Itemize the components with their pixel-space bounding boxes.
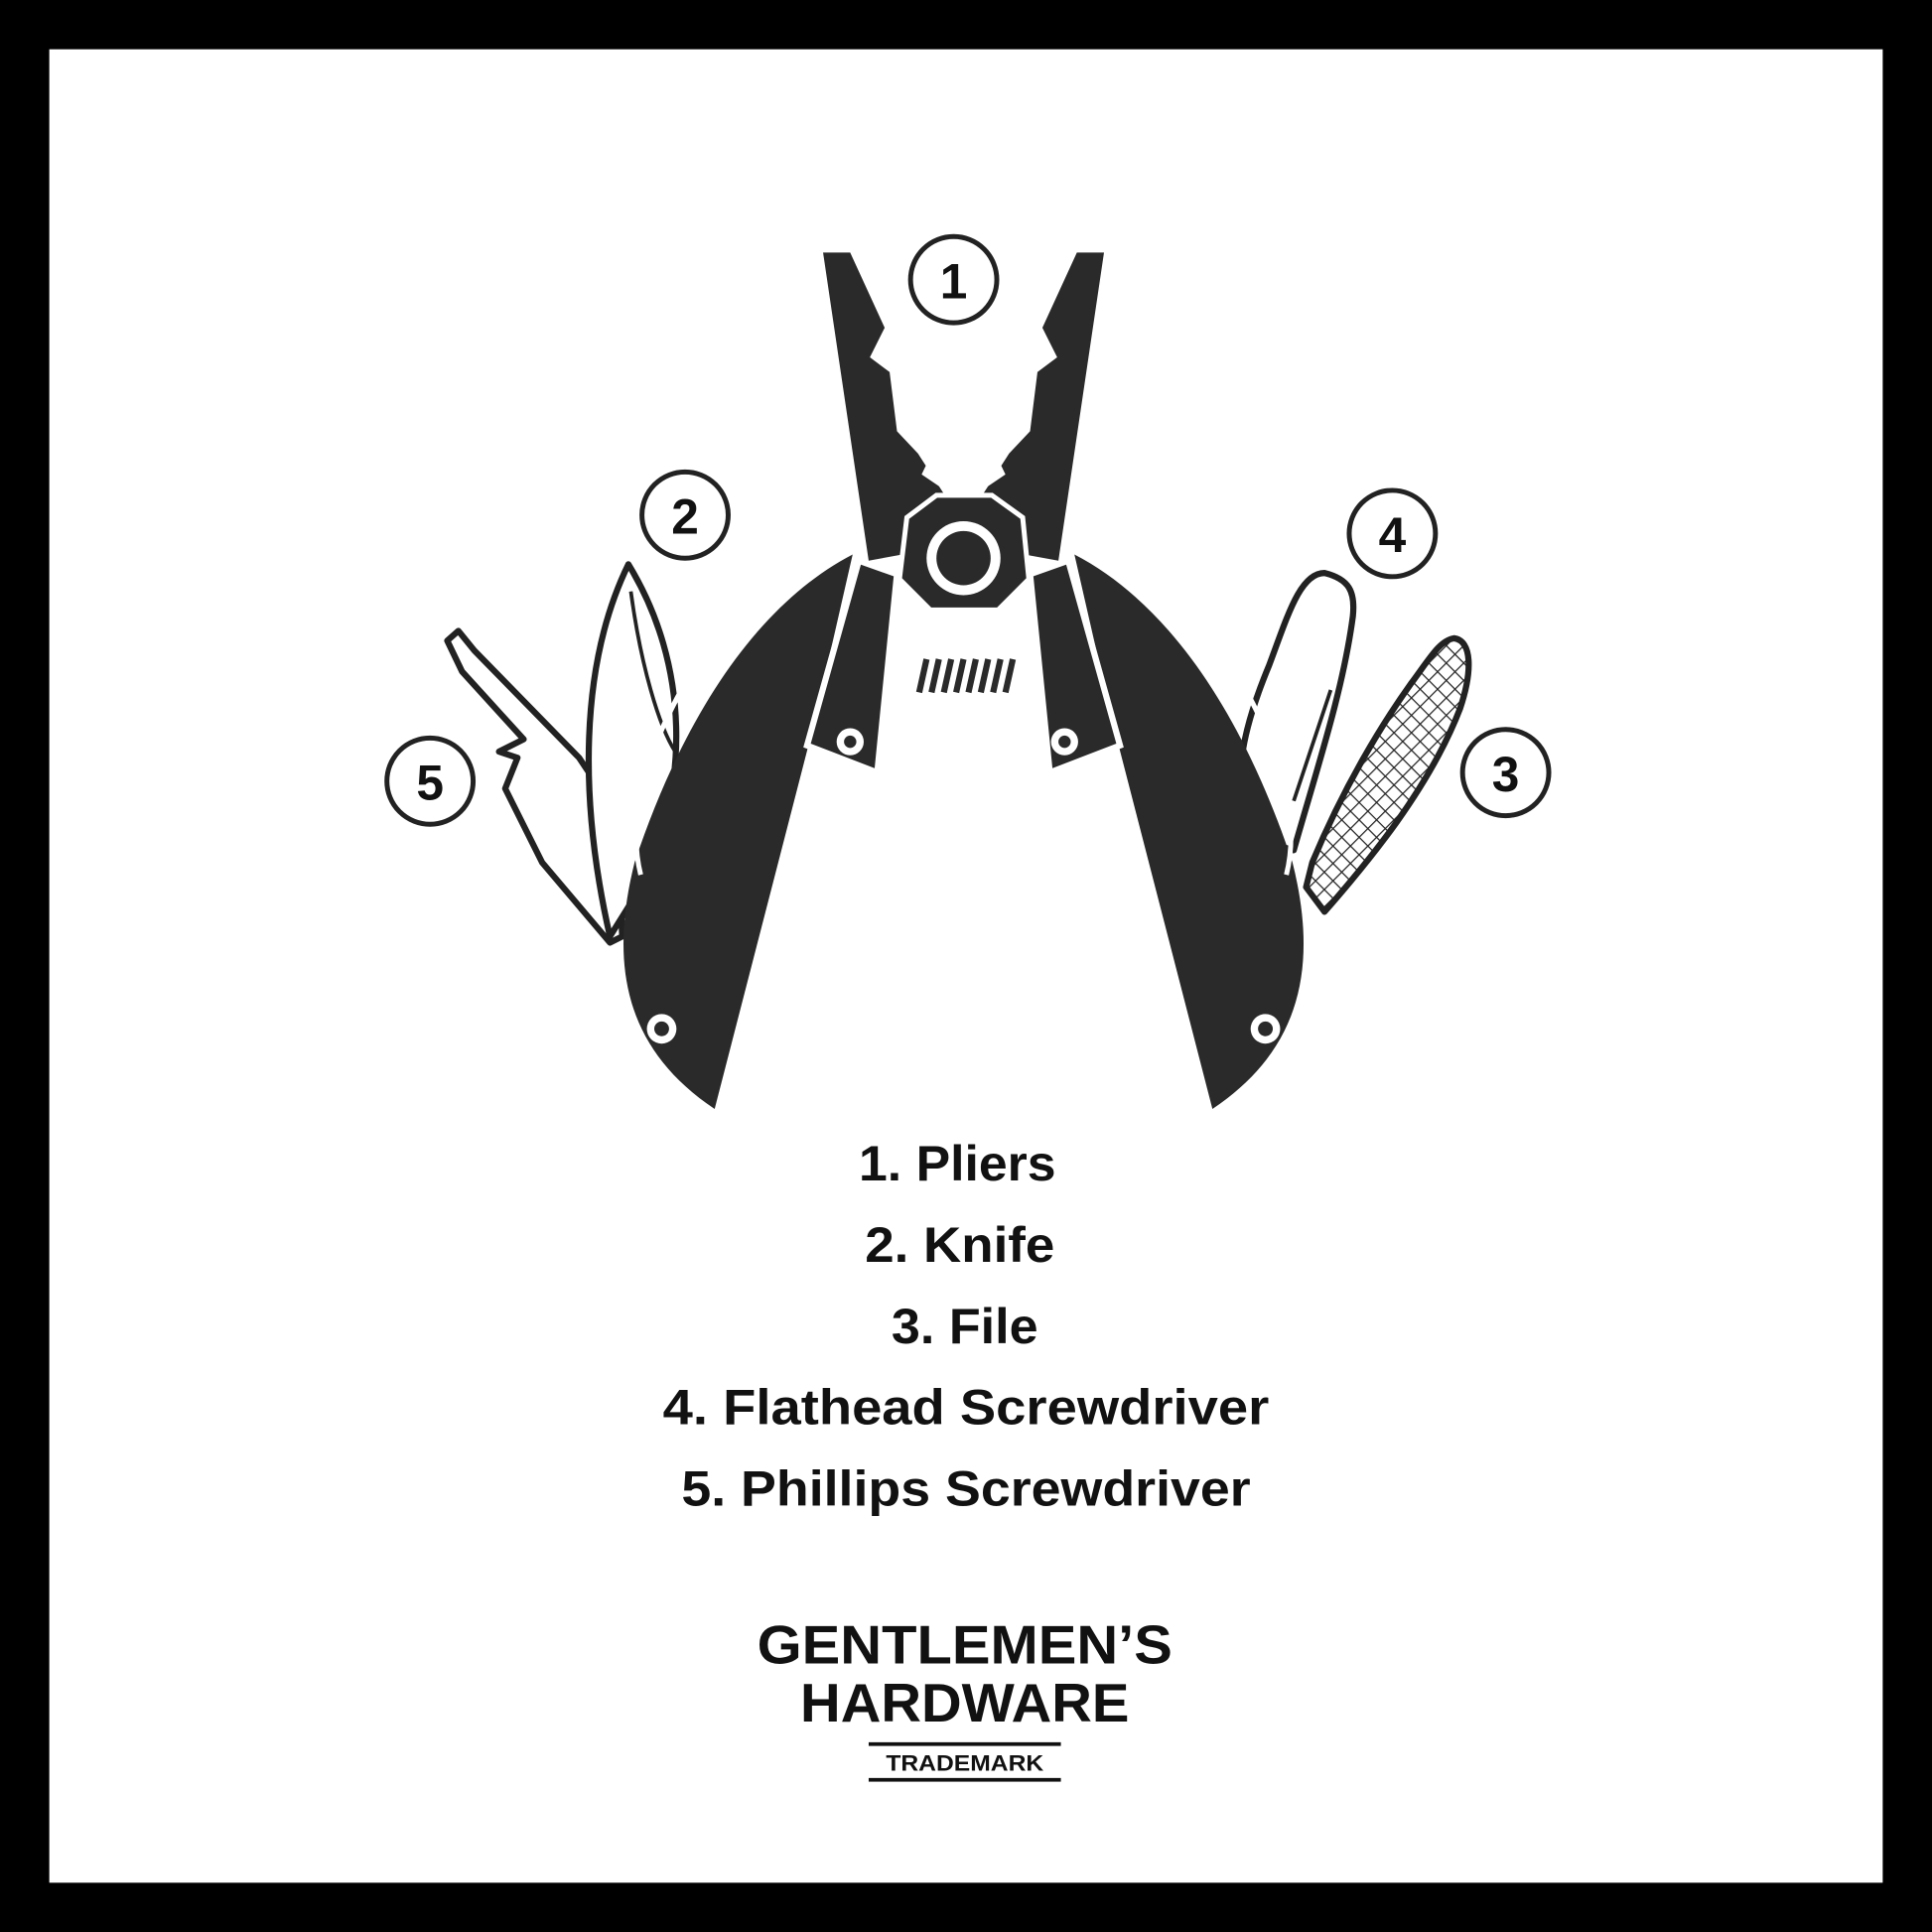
- tool list: 2. Knife: [865, 1217, 1054, 1273]
- pliers jaws: [823, 252, 1104, 561]
- callout 4: [1349, 490, 1436, 577]
- tool: flathead screwdriver: [1240, 573, 1353, 850]
- tool list: [663, 1136, 1269, 1517]
- spring: [919, 659, 1013, 692]
- callout 2: [642, 472, 728, 558]
- logo: [758, 1614, 1173, 1782]
- illustration: multitool: [448, 252, 1468, 1109]
- right handle: [1031, 554, 1304, 1109]
- tool list: 5. Phillips Screwdriver: [681, 1461, 1251, 1517]
- pivot: [899, 495, 1029, 610]
- logo: GENTLEMEN’S: [758, 1614, 1173, 1675]
- callout 3: 3: [1492, 747, 1519, 802]
- logo: HARDWARE: [800, 1673, 1129, 1733]
- tool list: 4. Flathead Screwdriver: [663, 1380, 1269, 1436]
- callout 3: [1462, 730, 1549, 816]
- tool list: 3. File: [892, 1299, 1038, 1354]
- left handle: [623, 554, 897, 1109]
- callout 4: 4: [1379, 507, 1407, 563]
- callout 1: [910, 236, 997, 323]
- tool: file: [1307, 638, 1468, 911]
- callout 1: 1: [940, 253, 967, 309]
- callout 5: 5: [416, 755, 444, 810]
- callout 2: 2: [671, 488, 699, 544]
- tool: knife: [589, 564, 676, 936]
- logo: TRADEMARK: [886, 1750, 1043, 1775]
- tool list: 1. Pliers: [859, 1136, 1056, 1191]
- callout 5: [387, 738, 474, 824]
- tool: phillips screwdriver: [448, 630, 622, 942]
